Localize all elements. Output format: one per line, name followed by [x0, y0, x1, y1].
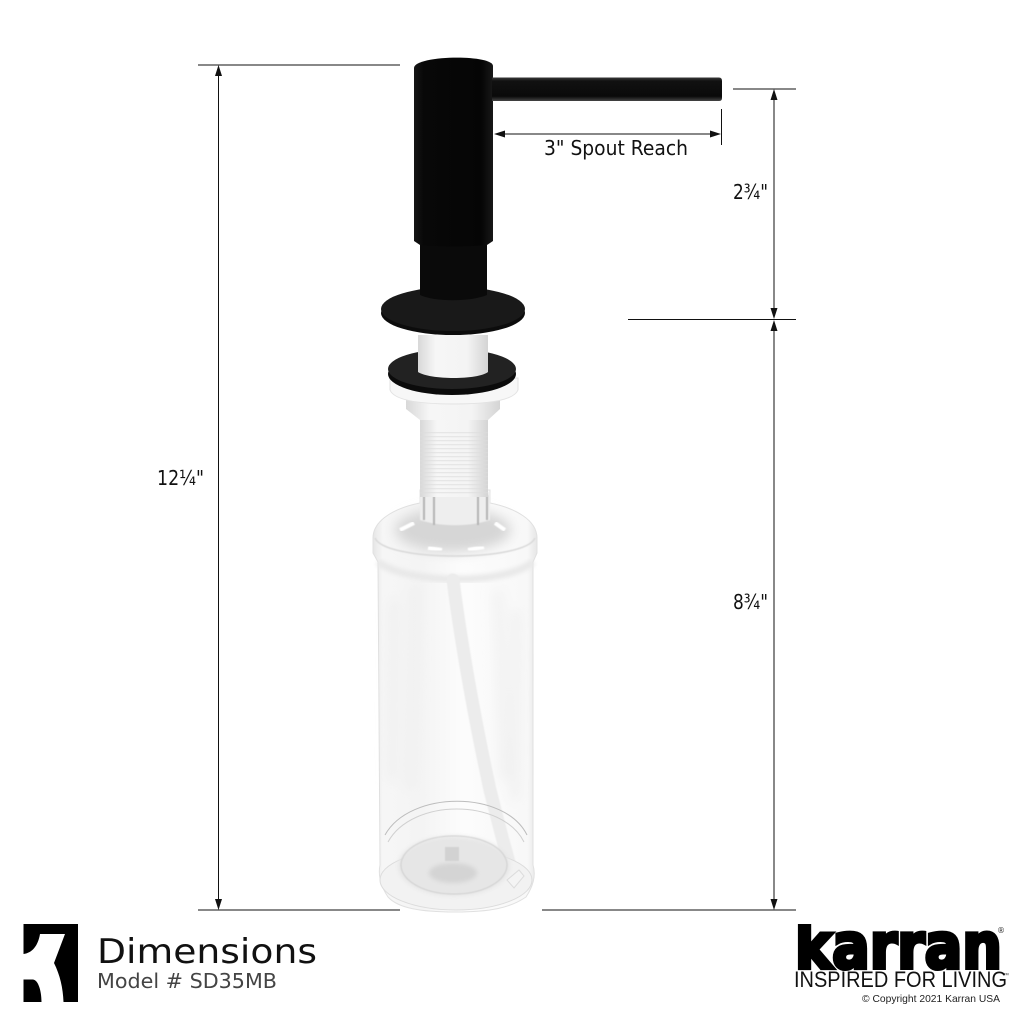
heading: Dimensions: Dimensions — [97, 932, 317, 972]
lower ring — [388, 335, 516, 395]
dimension: lower height 8¾ inches: 8¾" — [733, 590, 768, 614]
bottle base — [380, 850, 532, 910]
product: soap dispenser — [373, 58, 722, 912]
dimension: upper height 2¾ inches: 2¾" — [733, 180, 768, 204]
pump body — [414, 58, 493, 246]
icon: brand R mark — [24, 924, 78, 1002]
pump neck — [420, 240, 487, 300]
threaded shank — [390, 378, 518, 497]
upper flange — [381, 287, 525, 335]
logo: Karran: ™ — [1003, 972, 1009, 979]
logo: Karran: ® — [997, 926, 1005, 935]
dimension: spout reach 3 inches: 3" Spout Reach — [544, 136, 688, 160]
logo: Karran: karran — [795, 910, 1002, 983]
copyright note: © Copyright 2021 Karran USA — [862, 993, 1000, 1005]
spout — [492, 78, 722, 101]
dimension: lower height 8¾ inches — [542, 320, 796, 910]
dimension: overall height 12¼ inches — [157, 65, 400, 910]
subheading: model number: Model # SD35MB — [97, 969, 277, 993]
dimension: upper height 2¾ inches — [628, 89, 796, 320]
dip tube — [453, 580, 515, 882]
dimension: spout reach 3 inches — [494, 109, 722, 160]
bottle — [373, 490, 537, 912]
dimension: overall height 12¼ inches: 12¼" — [157, 466, 204, 490]
logo: Karran: INSPIRED FOR LIVING — [794, 967, 1007, 992]
